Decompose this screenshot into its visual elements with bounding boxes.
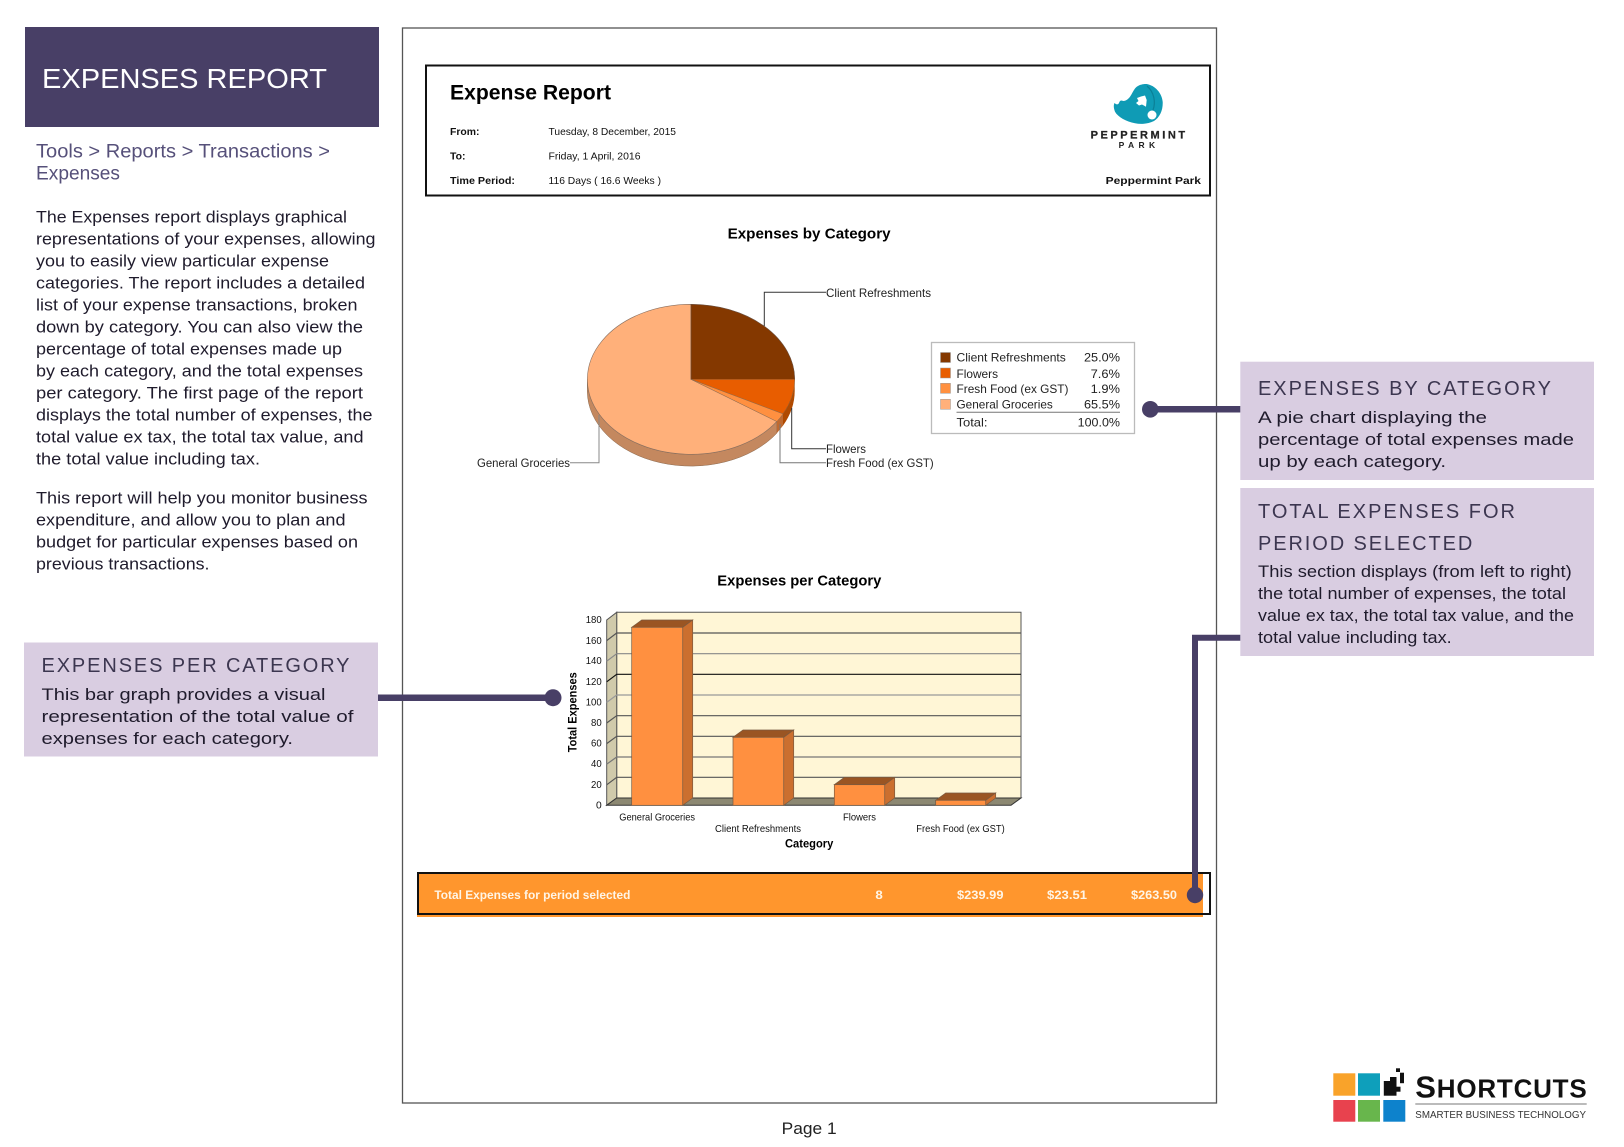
callout: total expenses for period selected: total value including tax. [1258,628,1452,647]
y axis labels: 40 [591,758,602,770]
text block: report description: list of your expense transactions, broken [36,296,358,314]
heading: expenses per category: Expenses per Category [717,574,881,590]
callout: expenses per category [24,642,378,756]
icon: Shortcuts logo [1333,1068,1587,1122]
text block: report description: The Expenses report displays graphical [36,208,347,226]
y axis labels: 0 [596,800,602,812]
report dates: Friday, 1 April, 2016 [548,150,641,162]
report dates: 116 Days ( 16.6 Weeks ) [548,175,661,187]
y axis labels: 20 [591,779,602,791]
legend row: flowers: 7.6% [1091,367,1120,381]
leader: fresh food: Fresh Food (ex GST) [826,456,934,470]
leader: fresh food [780,424,934,470]
y axis labels: 100 [586,696,602,708]
callout: total expenses for period selected: This section displays (from left to right) [1258,562,1572,581]
report dates: To: [450,150,466,162]
company name: Peppermint Park [1106,175,1201,187]
text block: report description: This report will help you monitor business [36,488,368,507]
title banner [25,27,379,127]
x axis labels: Fresh Food (ex GST) [916,823,1005,835]
callout: expenses per category: This bar graph provides a visual [42,685,326,704]
callout: expenses by category: EXPENSES BY CATEGORY [1258,378,1551,400]
text block: report description: you to easily view particular expense [36,252,329,270]
y axis labels: 160 [586,635,602,647]
legend total: 100.0% [1078,415,1120,429]
x axis labels: Client Refreshments [715,823,801,835]
slice: general groceries [587,304,777,454]
legend row: client refreshments [940,350,1120,364]
legend total: Total: [956,415,988,429]
total count: 8 [875,888,883,902]
total ex tax: $239.99 [957,888,1004,902]
icon: Peppermint Park logo: PEPPERMINT [1091,129,1185,141]
side walls [587,379,777,466]
text block: report description: categories. The report includes a detailed [36,274,365,292]
report dates: Tuesday, 8 December, 2015 [548,126,676,138]
report dates: Time Period: [450,175,515,187]
text block: report description: the total value including tax. [36,450,260,468]
text block: report description: percentage of total expenses made up [36,340,342,358]
arrow: pie legend connector [1142,401,1240,418]
bar chart [568,612,1021,850]
text block: report description: down by category. You can also view the [36,318,363,336]
callout: total expenses for period selected: TOTAL EXPENSES FOR [1258,501,1515,523]
text block: report description: budget for particular expenses based on [36,532,358,551]
bar: fresh food [936,793,996,805]
leader: general groceries: General Groceries [477,456,570,470]
legend row: general groceries [940,398,1120,412]
bar: general groceries [632,620,693,805]
pie chart [477,286,934,470]
x axis labels: Flowers [843,812,876,824]
arrow: totals connector [1187,638,1240,903]
x axis title: Category [785,838,834,850]
logo squares [1333,1073,1405,1122]
totals bar [417,873,1210,917]
text block: report description: representations of your expenses, allowing [36,230,376,248]
report header box [426,66,1210,196]
breadcrumb path: Tools > Reports > Transactions > [36,141,330,162]
legend row: fresh food [940,382,1120,396]
legend row: flowers: Flowers [956,367,998,381]
report title: Expense Report [450,82,611,104]
text block: report description: previous transactions. [36,554,210,573]
callout: expenses by category: A pie chart displaying the [1258,408,1487,427]
breadcrumb path [36,141,330,184]
callout: total expenses for period selected: value ex tax, the total tax value, and the [1258,606,1574,625]
text block: report description: total value ex tax, the total tax value, and [36,428,364,446]
y axis labels: 180 [586,614,602,626]
leader: general groceries [477,415,599,470]
report dates: From: [450,126,480,138]
bar: flowers [834,777,895,805]
callout: expenses by category [1240,362,1594,480]
x axis labels: General Groceries [619,812,695,824]
y axis labels: 80 [591,717,602,729]
pie legend [932,342,1134,434]
total inc tax: $263.50 [1131,888,1177,902]
page number: Page 1 [782,1119,837,1138]
text block: report description: displays the total number of expenses, the [36,406,372,424]
callout: expenses by category: percentage of total expenses made [1258,430,1574,449]
title banner: EXPENSES REPORT [42,63,327,94]
legend row: flowers [940,367,1120,381]
panel: report page frame [402,28,1216,1103]
heading: expenses by category: Expenses by Category [728,226,891,242]
y axis title: Total Expenses [568,672,580,752]
callout: total expenses for period selected: PERIOD SELECTED [1258,533,1472,555]
callout: total expenses for period selected [1240,488,1594,656]
text block: report description: per category. The first page of the report [36,384,363,402]
legend row: general groceries: 65.5% [1084,398,1120,412]
legend row: fresh food: Fresh Food (ex GST) [956,382,1068,396]
icon: Peppermint Park logo [1091,84,1185,150]
leader: flowers [792,408,866,456]
legend row: client refreshments: Client Refreshments [956,350,1066,364]
callout: total expenses for period selected: the total number of expenses, the total [1258,584,1566,603]
slice: fresh food [691,379,783,422]
legend total [956,415,1120,429]
bar: client refreshments [733,730,794,805]
leader: client refreshments [764,286,931,326]
legend row: client refreshments: 25.0% [1084,350,1120,364]
leader: client refreshments: Client Refreshments [826,286,931,300]
logo wordmark: SHORTCUTS [1415,1070,1587,1104]
x axis labels [619,812,1005,835]
text block: report description [36,208,376,573]
leader: flowers: Flowers [826,442,866,456]
callout: expenses by category: up by each category. [1258,452,1446,471]
y axis labels: 60 [591,738,602,750]
legend row: fresh food: 1.9% [1091,382,1120,396]
y axis labels: 120 [586,676,602,688]
text block: report description: by each category, and the total expenses [36,362,363,380]
icon: Peppermint Park logo: PARK [1119,140,1156,150]
callout: expenses per category: EXPENSES PER CATEGORY [42,655,350,677]
y axis labels [586,614,602,812]
logo tagline: SMARTER BUSINESS TECHNOLOGY [1415,1110,1586,1121]
slice: client refreshments [691,304,795,379]
legend row: general groceries: General Groceries [956,398,1053,412]
report dates [450,126,676,187]
slice: flowers [691,379,795,414]
breadcrumb path: Expenses [36,163,120,184]
arrow: bar chart connector [378,689,562,706]
y axis labels: 140 [586,655,602,667]
logo pixel stairs [1384,1068,1404,1096]
callout: expenses per category: representation of the total value of [42,707,354,726]
total tax: $23.51 [1047,888,1087,902]
totals label: Total Expenses for period selected [434,888,630,902]
text block: report description: expenditure, and allow you to plan and [36,510,346,529]
callout: expenses per category: expenses for each category. [42,729,293,748]
